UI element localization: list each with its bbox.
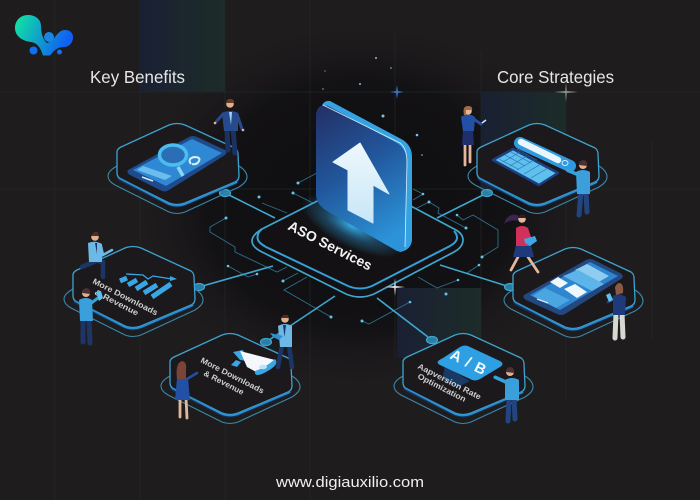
dark centre backdrop xyxy=(125,15,595,395)
icon: bar chart xyxy=(120,278,171,297)
panel: app screen phone xyxy=(504,248,643,338)
icon: keyboard xyxy=(493,149,558,185)
label: more downloads and revenue: More Downloads xyxy=(199,356,266,396)
label: ASO Services: ASO Services xyxy=(286,217,375,274)
person: man in navy suit, top left xyxy=(214,99,244,153)
icon: phone xyxy=(127,136,226,192)
person: woman in red top xyxy=(504,214,538,272)
panel: A/B optimization xyxy=(394,334,533,424)
logo xyxy=(15,15,73,56)
label: more downloads and revenue: & Revenue xyxy=(93,288,141,318)
panel: growth chart xyxy=(64,246,203,336)
heading: Core Strategies: Core Strategies xyxy=(497,67,614,87)
label: app conversion rate optimization: Optimization xyxy=(416,372,468,404)
panel: megaphone xyxy=(161,334,300,424)
sparkles and floating dots xyxy=(317,57,578,156)
person: man with tablet, left xyxy=(79,288,103,343)
panel: search phone xyxy=(108,124,247,214)
label: A/B: A/B xyxy=(447,346,489,379)
connector lines xyxy=(194,190,516,346)
icon: magnifier xyxy=(160,145,199,176)
icon: phone xyxy=(523,259,623,315)
label: more downloads and revenue: More Downloads xyxy=(91,277,160,318)
footer: website: www.digiauxilio.com xyxy=(275,474,424,491)
icon: A/B tile xyxy=(442,366,470,387)
central platform xyxy=(252,182,463,297)
person: sitting man xyxy=(82,232,112,277)
circuit lines and nodes xyxy=(210,173,498,324)
icon: up arrow xyxy=(333,143,389,223)
person: man in blue, A/B panel xyxy=(495,367,519,421)
panel: keyboard and search bar xyxy=(468,124,607,214)
icon: megaphone xyxy=(233,350,247,361)
person: woman with phone, white trousers xyxy=(606,283,626,338)
label: app conversion rate optimization: Aapversion Rate xyxy=(416,362,483,402)
central card with up arrow xyxy=(316,101,412,252)
person: man with clipboard xyxy=(270,315,292,367)
person: woman in navy skirt suit, top right xyxy=(461,106,486,165)
person: man in light blue, top right xyxy=(568,160,590,215)
person: woman in navy dress xyxy=(175,361,197,418)
heading: Key Benefits: Key Benefits xyxy=(90,67,185,87)
label: more downloads and revenue: & Revenue xyxy=(202,369,246,397)
sparkle on platform xyxy=(385,278,405,296)
icon: search bar xyxy=(520,143,570,166)
